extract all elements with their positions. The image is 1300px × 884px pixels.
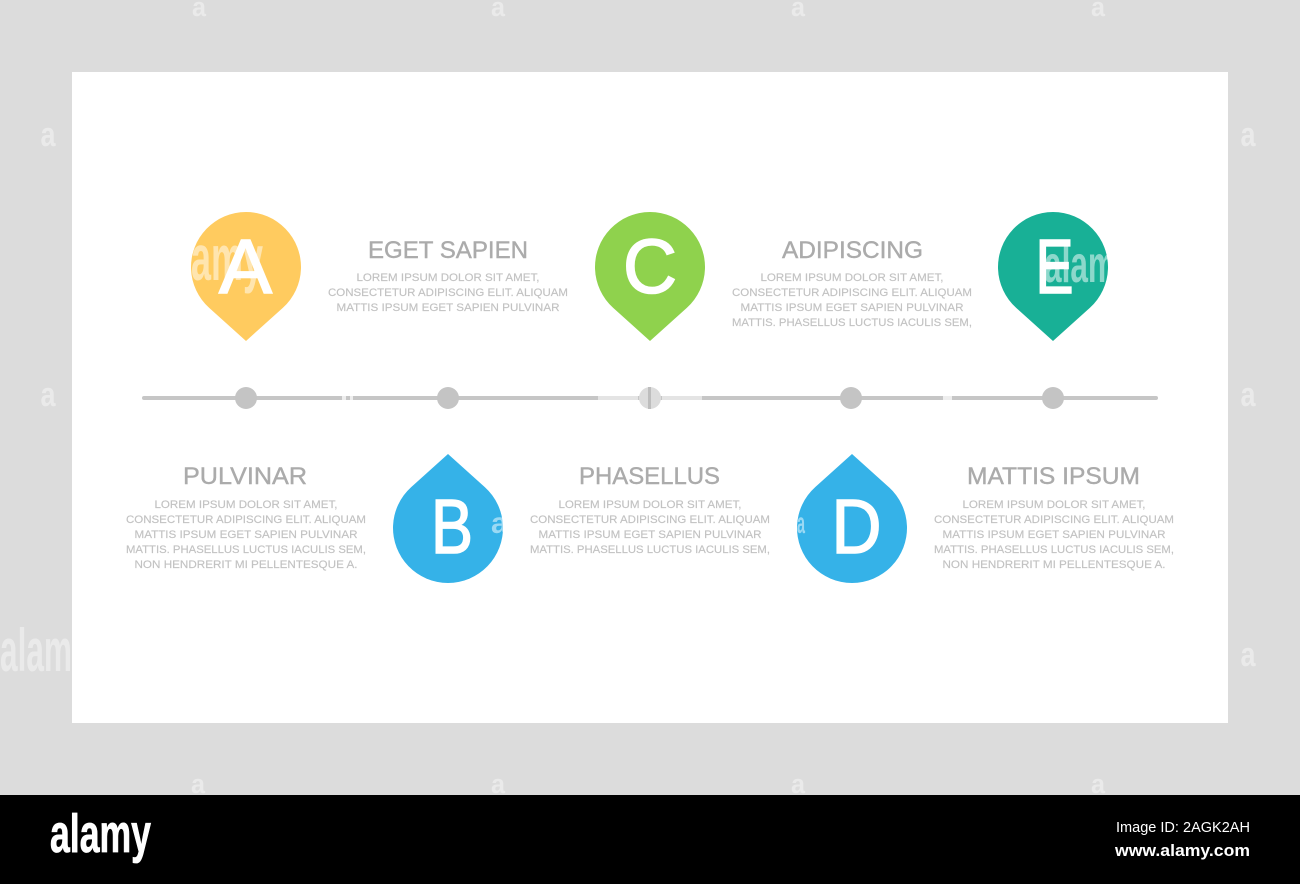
text block: mattis ipsum: NON HENDRERIT MI PELLENTESQUE A. bbox=[942, 559, 1166, 571]
watermark marks: a bbox=[791, 769, 806, 799]
text block: pulvinar: NON HENDRERIT MI PELLENTESQUE A. bbox=[134, 559, 358, 571]
text block: adipiscing: MATTIS IPSUM EGET SAPIEN PULVINAR bbox=[740, 302, 964, 314]
watermark marks: a bbox=[1240, 116, 1256, 154]
footer bar bbox=[0, 795, 1300, 884]
drop B: a bbox=[491, 507, 508, 540]
text block: adipiscing: LOREM IPSUM DOLOR SIT AMET, bbox=[760, 272, 944, 284]
watermark marks: a bbox=[1240, 376, 1256, 414]
watermark marks: a bbox=[40, 116, 56, 154]
pin A bbox=[191, 212, 301, 341]
text block: pulvinar: CONSECTETUR ADIPISCING ELIT. ALIQUAM bbox=[126, 514, 366, 526]
text block: adipiscing: MATTIS. PHASELLUS LUCTUS IACULIS SEM, bbox=[732, 317, 972, 329]
drop D: a bbox=[797, 507, 805, 540]
watermark marks: a bbox=[191, 769, 206, 799]
text block: phasellus: MATTIS IPSUM EGET SAPIEN PULVINAR bbox=[538, 529, 762, 541]
text block: pulvinar: MATTIS IPSUM EGET SAPIEN PULVINAR bbox=[134, 529, 358, 541]
text block: adipiscing bbox=[732, 272, 972, 329]
text block: pulvinar bbox=[126, 499, 366, 571]
text block: pulvinar: LOREM IPSUM DOLOR SIT AMET, bbox=[154, 499, 338, 511]
text block: mattis ipsum: LOREM IPSUM DOLOR SIT AMET, bbox=[962, 499, 1146, 511]
timeline axis bbox=[144, 387, 1156, 409]
heading: pulvinar: PULVINAR bbox=[183, 463, 307, 490]
pin C: C bbox=[623, 224, 677, 310]
watermark marks: a bbox=[1091, 769, 1106, 799]
text block: phasellus bbox=[530, 499, 770, 556]
text block: pulvinar: MATTIS. PHASELLUS LUCTUS IACULIS SEM, bbox=[126, 544, 366, 556]
watermark marks: a bbox=[40, 376, 56, 414]
text block: mattis ipsum: CONSECTETUR ADIPISCING ELIT. ALIQUAM bbox=[934, 514, 1174, 526]
text block: mattis ipsum: MATTIS IPSUM EGET SAPIEN PULVINAR bbox=[942, 529, 1166, 541]
footer url: www.alamy.com bbox=[1114, 841, 1250, 860]
text block: phasellus: MATTIS. PHASELLUS LUCTUS IACULIS SEM, bbox=[530, 544, 770, 556]
heading: adipiscing: ADIPISCING bbox=[782, 237, 923, 264]
pin E bbox=[998, 212, 1116, 341]
white slide panel bbox=[72, 72, 1228, 723]
drop B: B bbox=[431, 484, 473, 570]
text block: phasellus: CONSECTETUR ADIPISCING ELIT. ALIQUAM bbox=[530, 514, 770, 526]
footer logo: alamy bbox=[50, 804, 151, 864]
pin C bbox=[595, 212, 705, 341]
drop D: D bbox=[832, 484, 882, 570]
heading: eget sapien: EGET SAPIEN bbox=[368, 237, 528, 264]
text block: eget sapien bbox=[328, 272, 568, 314]
text block: eget sapien: MATTIS IPSUM EGET SAPIEN PULVINAR bbox=[336, 302, 560, 314]
text block: adipiscing: CONSECTETUR ADIPISCING ELIT. ALIQUAM bbox=[732, 287, 972, 299]
text block: phasellus: LOREM IPSUM DOLOR SIT AMET, bbox=[558, 499, 742, 511]
pin E: E bbox=[1036, 224, 1074, 310]
pin A: amy bbox=[191, 222, 263, 294]
watermark marks: alam bbox=[0, 617, 72, 684]
watermark marks: a bbox=[1240, 636, 1256, 674]
pin E: alam bbox=[1044, 236, 1116, 294]
pin A: A bbox=[219, 224, 273, 310]
drop D bbox=[797, 454, 907, 583]
text block: eget sapien: LOREM IPSUM DOLOR SIT AMET, bbox=[356, 272, 540, 284]
heading: mattis ipsum: MATTIS IPSUM bbox=[967, 463, 1140, 490]
text block: mattis ipsum bbox=[934, 499, 1174, 571]
heading: phasellus: PHASELLUS bbox=[579, 463, 720, 490]
text block: mattis ipsum: MATTIS. PHASELLUS LUCTUS IACULIS SEM, bbox=[934, 544, 1174, 556]
text block: eget sapien: CONSECTETUR ADIPISCING ELIT. ALIQUAM bbox=[328, 287, 568, 299]
drop B bbox=[393, 454, 508, 583]
watermark marks: a bbox=[491, 769, 506, 799]
footer image id: Image ID: 2AGK2AH bbox=[1116, 819, 1250, 836]
